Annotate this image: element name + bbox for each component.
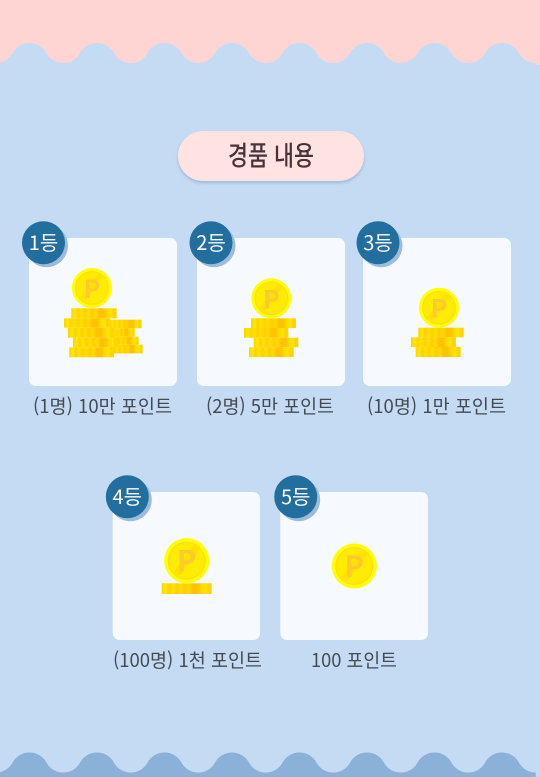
coin stack 3 (411, 328, 464, 357)
card 1 (29, 238, 177, 386)
badge 2: 2등 (196, 227, 226, 256)
badge 3 (356, 221, 402, 267)
badge 2 (190, 221, 236, 267)
coin stack 2 (244, 318, 298, 357)
badge 5: 5등 (281, 481, 310, 510)
coin stack 1 (64, 308, 143, 357)
card 5 (280, 492, 428, 640)
card 3 (363, 238, 511, 386)
badge 4: 4등 (113, 481, 142, 510)
card 4 (113, 492, 260, 640)
label 4: (100명) 1천 포인트 (113, 646, 262, 673)
badge 5 (274, 475, 320, 521)
icon: coin 2: P (263, 280, 280, 316)
label 5: 100 포인트 (311, 646, 397, 673)
icon: coin 5 (332, 544, 377, 588)
title text: 경품 내용 (228, 134, 314, 174)
icon: coin 3: P (431, 290, 447, 326)
icon: coin 4 (164, 538, 209, 583)
bottom blue wave band (0, 752, 536, 777)
icon: coin 4: P (177, 539, 196, 581)
icon: coin 1: P (84, 270, 100, 306)
badge 1: 1등 (29, 227, 58, 256)
top pink wave band (0, 0, 540, 70)
panel: rank 5 (274, 475, 428, 673)
icon: coin 3 (419, 288, 459, 328)
title pill (178, 131, 364, 183)
icon: coin 2 (251, 278, 291, 318)
panel: rank 2 (190, 221, 345, 419)
panel: rank 4 (106, 475, 262, 673)
label 1: (1명) 10만 포인트 (33, 392, 172, 419)
label 3: (10명) 1만 포인트 (367, 392, 506, 419)
badge 3: 3등 (363, 227, 393, 256)
badge 4 (106, 475, 152, 521)
panel: rank 3 (356, 221, 511, 419)
card 2 (197, 238, 345, 386)
label 2: (2명) 5만 포인트 (206, 392, 334, 419)
badge 1 (22, 221, 68, 267)
panel: rank 1 (22, 221, 177, 419)
icon: coin 5: P (345, 544, 364, 586)
icon: coin 1 (72, 268, 112, 308)
coin stack 4 (162, 583, 212, 594)
